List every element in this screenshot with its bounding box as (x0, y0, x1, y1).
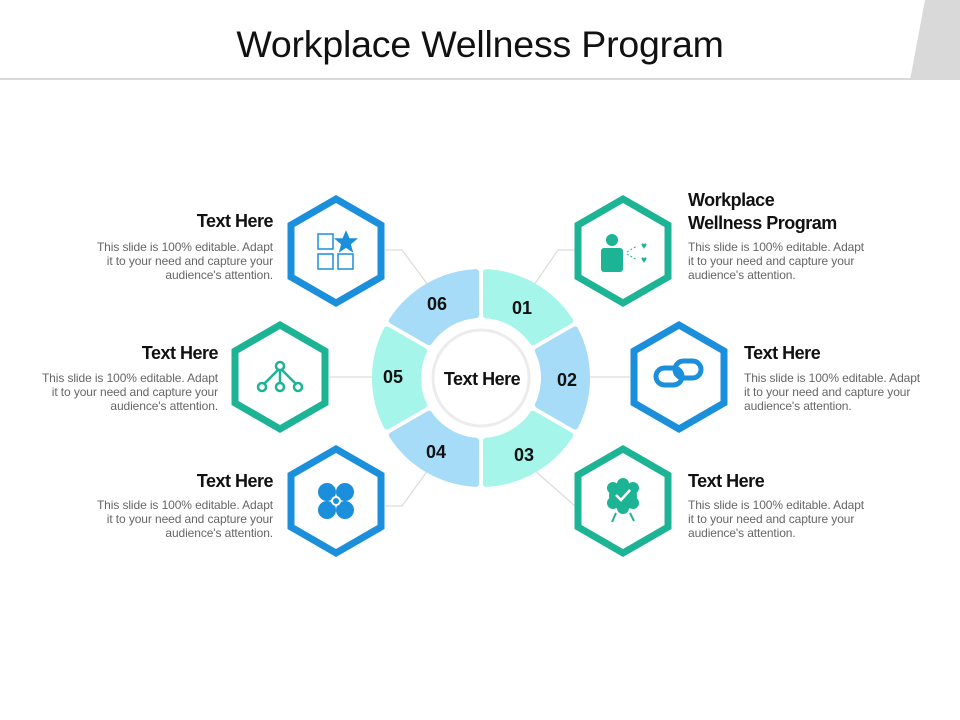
text: This slide is 100% editable. Adapt it to your need and capture your audience's attention. (97, 498, 273, 540)
text: This slide is 100% editable. Adapt it to your need and capture your audience's attention. (97, 240, 273, 282)
text block: middle left: Text Here (142, 343, 218, 363)
text: This slide is 100% editable. Adapt it to your need and capture your audience's attention. (744, 371, 920, 413)
segment numbers: 04 (426, 442, 446, 462)
text block: middle right: Text Here (744, 343, 820, 363)
text block: top left: Text Here (197, 211, 273, 231)
text block: top right (688, 190, 837, 233)
header accent shape (0, 0, 960, 80)
segment numbers: 06 (427, 294, 447, 314)
center label: Text Here (444, 369, 521, 389)
segment numbers: 03 (514, 445, 534, 465)
connectors (329, 250, 630, 506)
title: Workplace Wellness Program (236, 23, 724, 65)
icon: network (258, 362, 302, 391)
ring segments (345, 248, 617, 508)
text block: bottom right: Text Here (688, 471, 764, 491)
icon: shapes (318, 232, 356, 269)
text: This slide is 100% editable. Adapt it to your need and capture your audience's attention. (688, 240, 864, 282)
icon: person hearts (601, 234, 647, 272)
segment numbers (383, 294, 577, 465)
text: This slide is 100% editable. Adapt it to your need and capture your audience's attention. (688, 498, 864, 540)
segment numbers: 01 (512, 298, 532, 318)
icon: flower (318, 483, 354, 519)
icon: person hearts: ♥ (641, 255, 647, 266)
icon: link (656, 361, 701, 385)
text block: top right: Wellness Program (688, 213, 837, 233)
text: This slide is 100% editable. Adapt it to your need and capture your audience's attention. (42, 371, 218, 413)
header band (0, 0, 960, 80)
segment numbers: 02 (557, 370, 577, 390)
segment numbers: 05 (383, 367, 403, 387)
text block: bottom left: Text Here (197, 471, 273, 491)
hexagons (235, 199, 724, 553)
icon: person hearts: ♥ (641, 241, 647, 252)
icon: badge (607, 478, 639, 522)
text block: top right: Workplace (688, 190, 774, 210)
